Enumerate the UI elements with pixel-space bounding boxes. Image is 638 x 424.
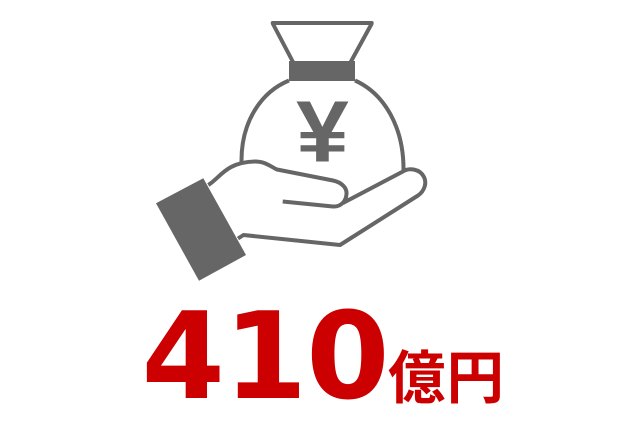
shirt cuff	[156, 178, 246, 281]
icon: open hand	[156, 162, 425, 281]
amount number: 410	[142, 288, 388, 424]
bag tie band	[289, 61, 355, 81]
yen symbol: ¥	[296, 84, 349, 181]
amount unit: 億円	[388, 347, 505, 411]
hand outline	[208, 162, 425, 245]
icon: yen money bag	[241, 23, 404, 181]
bag neck funnel	[273, 23, 372, 62]
bag body	[241, 80, 404, 171]
amount: 410 oku yen	[142, 288, 505, 424]
